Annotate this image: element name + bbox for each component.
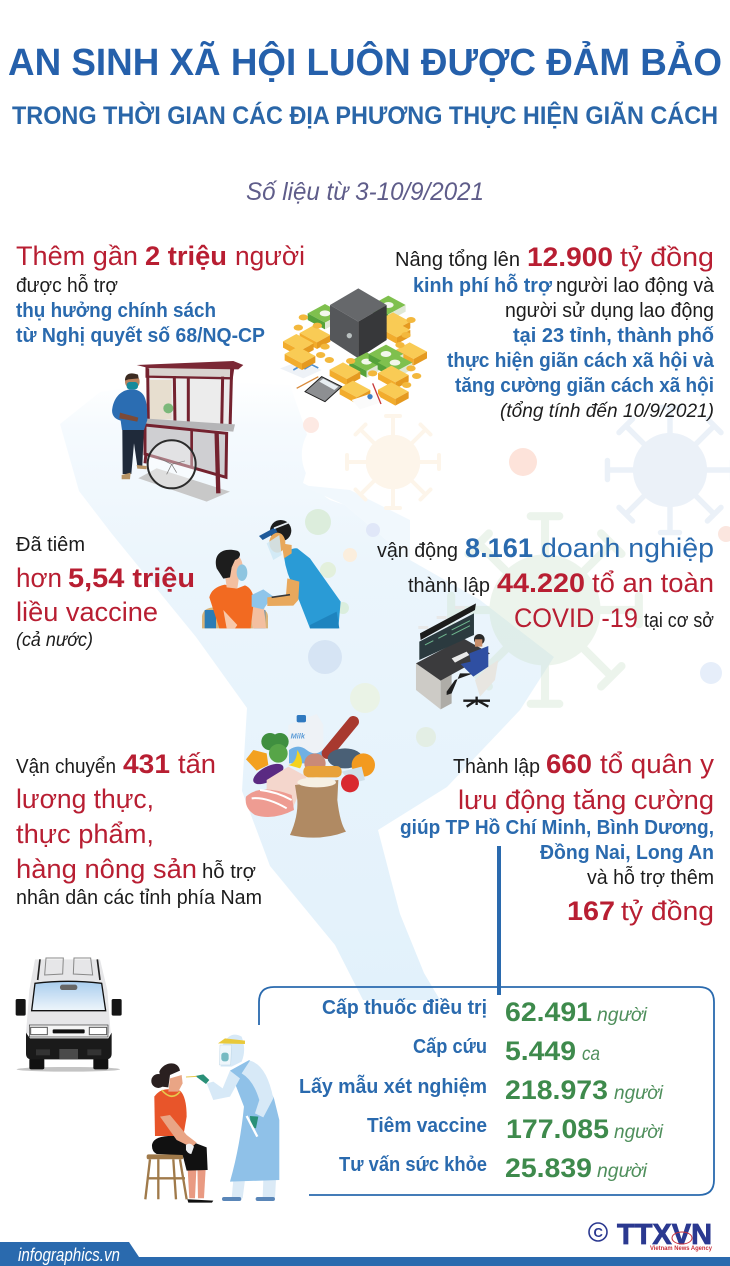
stat row: testing: người — [614, 1083, 664, 1104]
stat row: emergency: ca — [582, 1044, 600, 1065]
title: AN SINH XÃ HỘI LUÔN ĐƯỢC ĐẢM BẢO — [8, 39, 722, 84]
text block: 660 medical teams: Đồng Nai, Long An — [540, 842, 714, 864]
stat row: testing: 218.973 — [505, 1075, 608, 1105]
stat row: emergency: Cấp cứu — [413, 1036, 487, 1058]
text block: businesses and covid teams: COVID -19 — [514, 603, 638, 633]
stat row: treatment — [322, 997, 648, 1027]
connector line to stats box — [497, 846, 501, 995]
text block: food transport: 431 — [123, 749, 170, 779]
text block: 2 million people: được hỗ trợ — [16, 274, 118, 297]
text block: 12,900 billion: 12.900 — [527, 242, 613, 272]
text block: 660 medical teams — [400, 749, 715, 926]
text block: 2 million people: thụ hưởng chính sách — [16, 300, 216, 322]
text block: food transport: nhân dân các tỉnh phía Nam — [16, 887, 262, 909]
text block: 660 medical teams: Thành lập — [453, 756, 540, 778]
text block: businesses and covid teams — [377, 533, 714, 633]
text block: food transport: thực phẩm, — [16, 819, 154, 849]
stat row: vaccination: người — [614, 1122, 664, 1143]
stat row: emergency — [413, 1036, 600, 1066]
text block: businesses and covid teams: 44.220 — [497, 568, 585, 598]
stat row: health advice — [339, 1153, 648, 1183]
footer bar: infographics.vn — [18, 1245, 120, 1265]
text block: 12,900 billion — [395, 242, 715, 422]
logo: TTXVN: C — [594, 1225, 604, 1240]
stat row: vaccination: 177.085 — [506, 1114, 609, 1144]
text block: 2 million people: 2 triệu — [145, 241, 227, 271]
background viruses and dots — [303, 407, 730, 747]
text block: 2 million people: người — [235, 241, 305, 271]
panel: medical stats box — [259, 987, 714, 1195]
text block: vaccine doses: (cả nước) — [16, 630, 93, 651]
text block: 660 medical teams: 167 — [567, 896, 615, 926]
icon: street vendor with cart — [112, 361, 243, 502]
text block: businesses and covid teams: vận động — [377, 540, 458, 562]
text block: food transport: hàng nông sản — [16, 854, 197, 884]
text block: 660 medical teams: 660 — [546, 749, 592, 779]
stat row: health advice: 25.839 — [505, 1153, 592, 1183]
text block: businesses and covid teams: doanh nghiệp — [541, 533, 714, 563]
stat row: testing — [299, 1074, 664, 1105]
text block: 2 million people: Thêm gần — [16, 241, 138, 271]
background map — [60, 380, 554, 1000]
text block: 2 million people: từ Nghị quyết số 68/NQ-CP — [16, 325, 265, 347]
text block: vaccine doses: 5,54 triệu — [68, 563, 195, 593]
icon: food and rice sack: Milk — [291, 731, 306, 740]
text block: businesses and covid teams: 8.161 — [465, 533, 533, 563]
text block: 12,900 billion: người lao động và — [556, 275, 715, 297]
text block: 660 medical teams: tỷ đồng — [621, 896, 714, 926]
text block: 2 million people — [16, 241, 305, 347]
text block: 12,900 billion: (tổng tính đến 10/9/2021) — [500, 401, 714, 422]
stat row: vaccination: Tiêm vaccine — [367, 1115, 487, 1137]
icon: ambulance van — [16, 958, 122, 1072]
text block: food transport: tấn — [178, 749, 216, 779]
icon: food and rice sack — [246, 714, 375, 838]
footer bar — [0, 1242, 730, 1266]
stat row: treatment: Cấp thuốc điều trị — [322, 997, 487, 1019]
icon: safe, gold and money — [280, 288, 427, 409]
text block: food transport — [16, 749, 262, 909]
text block: food transport: lương thực, — [16, 784, 154, 814]
text block: vaccine doses — [16, 534, 195, 651]
text block: 12,900 billion: tỷ đồng — [620, 242, 714, 272]
stat row: emergency: 5.449 — [505, 1036, 576, 1066]
text block: businesses and covid teams: thành lập — [408, 575, 490, 597]
text block: 660 medical teams: giúp TP Hồ Chí Minh, Bình Dương, — [400, 817, 714, 839]
stat row: treatment: người — [597, 1005, 648, 1026]
text block: 660 medical teams: tổ quân y — [600, 749, 715, 779]
text block: 12,900 billion: tại 23 tỉnh, thành phố — [513, 325, 714, 347]
icon: operator at control desk — [416, 603, 498, 709]
stat row: testing: Lấy mẫu xét nghiệm — [299, 1074, 487, 1098]
text block: businesses and covid teams: tổ an toàn — [592, 568, 714, 598]
text block: 12,900 billion: Nâng tổng lên — [395, 249, 520, 271]
stat row: health advice: người — [597, 1161, 648, 1182]
logo: TTXVN: Vietnam News Agency — [650, 1245, 712, 1252]
text block: 12,900 billion: thực hiện giãn cách xã hội và — [447, 350, 715, 372]
text block: vaccine doses: hơn — [16, 563, 62, 593]
text block: 12,900 billion: tăng cường giãn cách xã hội — [455, 375, 714, 397]
icon: nurse vaccinating patient — [202, 520, 341, 628]
logo: TTXVN: TTXVN — [617, 1219, 712, 1251]
stat row: treatment: 62.491 — [505, 997, 592, 1027]
text block: food transport: hỗ trợ — [202, 860, 256, 883]
stat row: vaccination — [367, 1114, 664, 1144]
text block: 660 medical teams: lưu động tăng cường — [458, 785, 714, 815]
text block: vaccine doses: Đã tiêm — [16, 534, 85, 556]
stat row: health advice: Tư vấn sức khỏe — [339, 1154, 487, 1176]
icon: medic swabbing seated woman — [145, 1035, 279, 1203]
date note: Số liệu từ 3-10/9/2021 — [246, 178, 484, 206]
text block: 12,900 billion: kinh phí hỗ trợ — [413, 273, 553, 297]
text block: vaccine doses: liều vaccine — [16, 597, 158, 627]
text block: food transport: Vận chuyển — [16, 756, 116, 778]
text block: 12,900 billion: người sử dụng lao động — [505, 300, 714, 322]
text block: 660 medical teams: và hỗ trợ thêm — [587, 866, 714, 889]
text block: businesses and covid teams: tại cơ sở — [644, 610, 714, 632]
